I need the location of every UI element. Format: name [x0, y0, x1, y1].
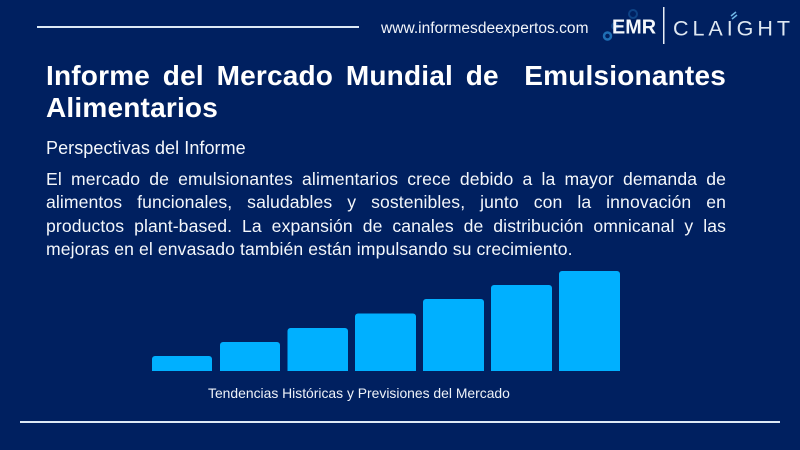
logo divider: [663, 7, 664, 44]
icon: EMR dots: [604, 10, 637, 40]
chart caption: Tendencias Históricas y Previsiones del Mercado: [208, 385, 510, 401]
top rule: [37, 26, 359, 28]
title: Alimentarios: [46, 92, 218, 122]
bar 4: [355, 314, 416, 371]
bar 1: [152, 356, 212, 371]
title: [46, 60, 726, 122]
bar 3: [288, 328, 348, 371]
website url: www.informesdeexpertos.com: [381, 20, 589, 37]
body paragraph: [46, 168, 726, 259]
title: Informe del Mercado Mundial de Emulsionantes: [46, 60, 726, 91]
bottom rule: [20, 421, 780, 423]
subheading: Perspectivas del Informe: [46, 138, 246, 158]
bar 5: [423, 299, 484, 371]
bar 7: [559, 271, 620, 371]
bar 2: [220, 342, 280, 371]
icon: Claight accent: [731, 12, 737, 19]
body paragraph: alimentos funcionales, saludables y sostenibles, junto con la innovación en: [46, 192, 726, 212]
Claight wordmark: CLAIGHT: [673, 16, 790, 40]
EMR wordmark: EMR: [612, 16, 657, 38]
body paragraph: productos plant-based. La expansión de canales de distribución omnicanal y las: [46, 216, 726, 236]
bar 6: [491, 285, 552, 371]
body paragraph: El mercado de emulsionantes alimentarios crece debido a la mayor demanda de: [46, 168, 726, 188]
bar chart: [152, 271, 620, 371]
body paragraph: mejoras en el envasado también están impulsando su crecimiento.: [46, 239, 573, 259]
logo: EMR and Claight: [602, 7, 790, 44]
